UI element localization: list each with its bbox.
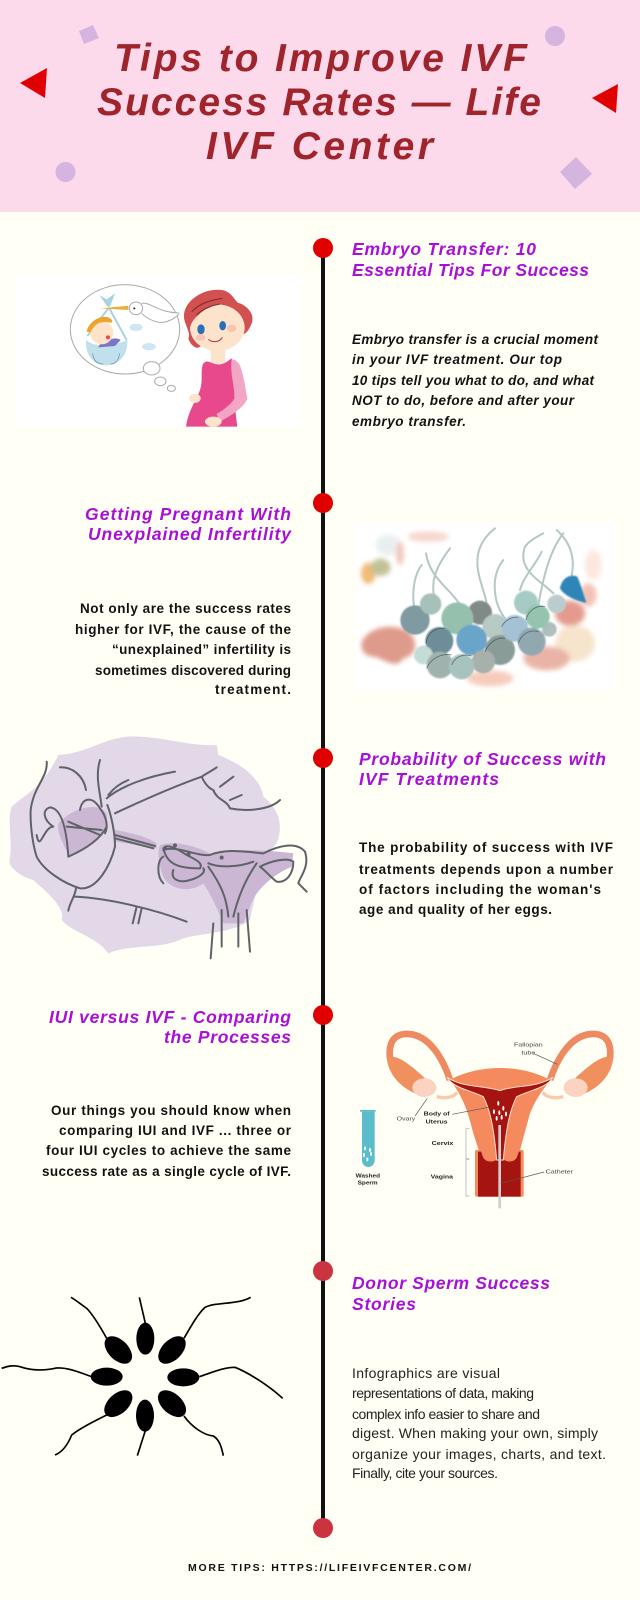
test tube <box>360 1110 376 1167</box>
sperm in uterus <box>493 1101 507 1121</box>
panel: donor sperm <box>2 1273 606 1481</box>
text block: donor sperm: Infographics are visual <box>352 1365 500 1381</box>
illustration: ring of sperm silhouettes <box>2 1297 283 1456</box>
text block: unexplained infertility: “unexplained” infertility is <box>112 642 291 657</box>
diagram labels: Fallopian <box>514 1043 543 1049</box>
catheter <box>498 1125 501 1208</box>
illustration: pregnant mother dreaming of stork and baby <box>16 275 302 427</box>
leader lines <box>415 1053 557 1183</box>
footer link: MORE TIPS: HTTPS://LIFEIVFCENTER.COM/ <box>188 1562 471 1574</box>
heading: probability of success <box>359 749 606 789</box>
title: IVF Center <box>206 125 435 168</box>
panel: probability of success <box>9 737 614 958</box>
heading: IUI versus IVF <box>49 1007 291 1047</box>
text block: embryo transfer: NOT to do, before and after your <box>352 393 575 408</box>
heading: embryo transfer: Essential Tips For Success <box>352 260 589 280</box>
diagram labels: Uterus <box>426 1120 448 1126</box>
text block: donor sperm: representations of data, making <box>352 1385 534 1401</box>
title <box>97 37 541 168</box>
uterus body <box>450 1068 550 1150</box>
text block: unexplained infertility: higher for IVF, the cause of the <box>75 622 291 637</box>
text block: embryo transfer: 10 tips tell you what to do, and what <box>352 373 594 388</box>
diagram labels: Body of <box>424 1112 450 1118</box>
heading: probability of success: IVF Treatments <box>359 769 499 789</box>
heading: embryo transfer: Embryo Transfer: 10 <box>352 239 536 259</box>
text block: IUI versus IVF: comparing IUI and IVF ... three or <box>59 1123 292 1138</box>
text block: unexplained infertility: treatment. <box>215 682 291 697</box>
diagram labels: Cervix <box>432 1141 453 1147</box>
heading: probability of success: Probability of Success with <box>359 749 606 769</box>
diagram labels: Vagina <box>431 1175 453 1181</box>
uterine cavity <box>447 1077 553 1160</box>
illustration: watercolor sperm and egg cells <box>356 523 615 690</box>
text block: embryo transfer <box>352 332 598 429</box>
diagram labels: Catheter <box>546 1169 573 1175</box>
text block: IUI versus IVF: four IUI cycles to achieve the same <box>46 1143 291 1158</box>
right tube and ovary <box>543 1034 613 1098</box>
text block: unexplained infertility: sometimes discovered during <box>95 663 291 678</box>
text block: embryo transfer: embryo transfer. <box>352 414 466 429</box>
heading: donor sperm: Donor Sperm Success <box>352 1273 550 1293</box>
text block: donor sperm <box>352 1365 606 1481</box>
text block: donor sperm: organize your images, charts, and text. <box>352 1446 606 1462</box>
icon: red triangle right <box>592 84 618 113</box>
text block: probability of success: of factors including the woman's <box>359 882 601 897</box>
diagram labels: tube <box>521 1050 535 1056</box>
text block: unexplained infertility: Not only are the success rates <box>80 601 291 616</box>
cervix and vagina brackets <box>466 1129 469 1196</box>
heading: unexplained infertility: Getting Pregnant With <box>85 504 291 524</box>
text block: probability of success: age and quality of her eggs. <box>359 902 552 917</box>
text block: embryo transfer: in your IVF treatment. Our top <box>352 352 562 367</box>
diagram labels: Sperm <box>358 1181 378 1187</box>
icon: large lilac diamond <box>560 157 592 189</box>
heading: unexplained infertility <box>85 504 292 544</box>
diagram labels <box>356 1043 573 1187</box>
header banner <box>0 0 640 212</box>
text block: embryo transfer: Embryo transfer is a crucial moment <box>352 332 598 347</box>
vagina <box>475 1150 524 1197</box>
heading: unexplained infertility: Unexplained Infertility <box>88 524 292 544</box>
heading: embryo transfer <box>352 239 589 280</box>
panel: unexplained infertility <box>75 504 615 697</box>
text block: donor sperm: digest. When making your own, simply <box>352 1425 598 1441</box>
cervix lobes <box>480 1148 520 1162</box>
text block: IUI versus IVF <box>42 1103 292 1179</box>
title: Tips to Improve IVF <box>114 37 528 80</box>
icon: lilac circle bottom left <box>56 162 76 182</box>
illustration: syringe and uterus line drawing <box>9 737 307 958</box>
title: Success Rates — Life <box>97 81 541 124</box>
diagram labels: Washed <box>356 1173 380 1179</box>
dark cell outlines <box>426 606 545 668</box>
text block: donor sperm: Finally, cite your sources. <box>352 1465 498 1481</box>
text block: IUI versus IVF: success rate as a single cycle of IVF. <box>42 1164 291 1179</box>
timeline line and markers <box>313 238 333 1538</box>
illustration: IUI uterus diagram <box>356 1034 613 1208</box>
heading: IUI versus IVF: the Processes <box>164 1027 291 1047</box>
text block: donor sperm: complex info easier to share and <box>352 1406 540 1422</box>
text block: IUI versus IVF: Our things you should know when <box>51 1103 291 1118</box>
icon: red triangle left <box>20 68 47 98</box>
text block: unexplained infertility <box>75 601 291 697</box>
text block: probability of success: treatments depends upon a number <box>359 862 614 877</box>
panel: embryo transfer <box>16 239 599 429</box>
text block: probability of success <box>359 840 614 917</box>
text block: probability of success: The probability of success with IVF <box>359 840 613 855</box>
heading: donor sperm <box>352 1273 550 1314</box>
heading: IUI versus IVF: IUI versus IVF - Comparing <box>49 1007 291 1027</box>
heading: donor sperm: Stories <box>352 1294 416 1314</box>
icon: lilac circle top right <box>545 26 565 46</box>
panel: IUI versus IVF <box>42 1007 613 1208</box>
icon: small lilac diamond <box>79 25 99 44</box>
diagram labels: Ovary <box>397 1117 416 1123</box>
left tube and ovary <box>387 1034 457 1098</box>
